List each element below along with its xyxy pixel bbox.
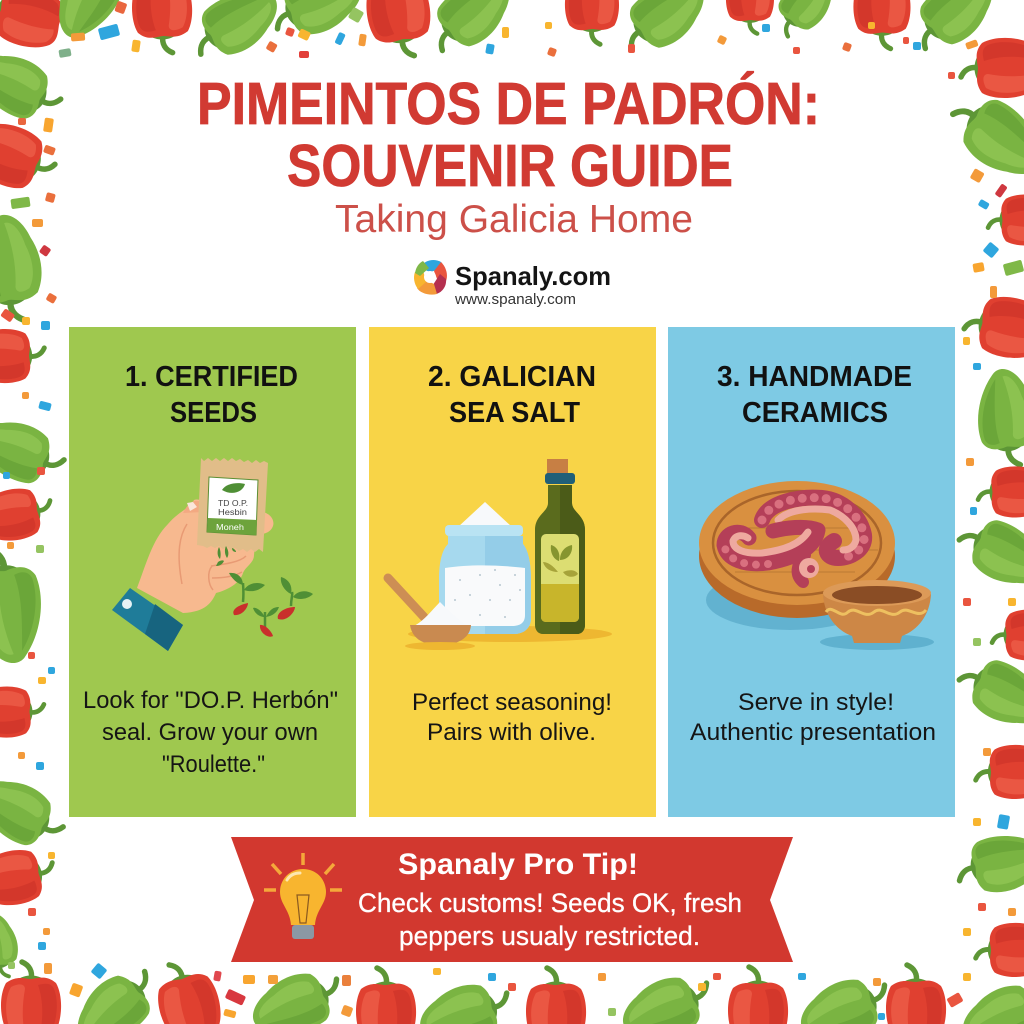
text: handmade ceramics: Authentic presentation: [690, 719, 936, 746]
text: galician sea salt: Pairs with olive.: [427, 719, 596, 746]
icon: hand holding seed packet: [112, 458, 313, 651]
text: certified seeds: seal. Grow your own: [102, 719, 318, 746]
heading: handmade ceramics: 3. HANDMADE: [717, 361, 912, 393]
seed packet: [197, 458, 268, 552]
octopus tentacles: [724, 498, 864, 582]
icon: salt jar: [408, 502, 612, 642]
seed packet: TD O.P.: [218, 498, 248, 508]
text: galician sea salt: [412, 689, 612, 746]
icon: ceramic bowl: [820, 580, 934, 650]
tip text: Check customs! Seeds OK, fresh: [358, 888, 742, 918]
heading: certified seeds: [125, 361, 298, 429]
icon: olive oil bottle: [535, 459, 585, 634]
brand name: Spanaly.com: [455, 261, 611, 291]
callout: pro tip banner: [231, 837, 793, 962]
title: [197, 71, 820, 199]
panel: galician sea salt: [369, 327, 656, 817]
seed packet: Moneh: [216, 522, 244, 532]
text: certified seeds: "Roulette.": [162, 751, 265, 778]
subtitle: Taking Galicia Home: [335, 198, 693, 241]
icon: wooden salt spoon and bowl: [388, 578, 475, 650]
panel: certified seeds: [69, 327, 356, 817]
heading: galician sea salt: 2. GALICIAN: [428, 361, 596, 393]
icon: wooden board with octopus: [699, 481, 895, 630]
heading: handmade ceramics: [717, 361, 912, 429]
text: handmade ceramics: Serve in style!: [738, 689, 894, 716]
text: certified seeds: Look for "DO.P. Herbón": [83, 687, 338, 714]
text: handmade ceramics: [690, 689, 936, 746]
icon: light bulb: [264, 853, 342, 939]
text: certified seeds: [83, 687, 338, 778]
tip text: [358, 888, 742, 951]
icon: pinwheel logo: [414, 260, 447, 295]
seed packet: Hesbin: [218, 507, 247, 517]
tip text: peppers usualy restricted.: [399, 921, 700, 951]
heading: galician sea salt: SEA SALT: [449, 397, 580, 429]
logo: Spanaly: [414, 260, 611, 308]
website url: www.spanaly.com: [454, 292, 576, 308]
tip heading: Spanaly Pro Tip!: [398, 848, 638, 881]
heading: certified seeds: 1. CERTIFIED: [125, 361, 298, 393]
title: SOUVENIR GUIDE: [287, 133, 733, 199]
title: PIMEINTOS DE PADRÓN:: [197, 71, 820, 137]
heading: certified seeds: SEEDS: [170, 397, 257, 429]
panel: handmade ceramics: [668, 327, 955, 817]
heading: handmade ceramics: CERAMICS: [742, 397, 888, 429]
seedlings: [229, 573, 313, 637]
heading: galician sea salt: [428, 361, 596, 429]
text: galician sea salt: Perfect seasoning!: [412, 689, 612, 716]
